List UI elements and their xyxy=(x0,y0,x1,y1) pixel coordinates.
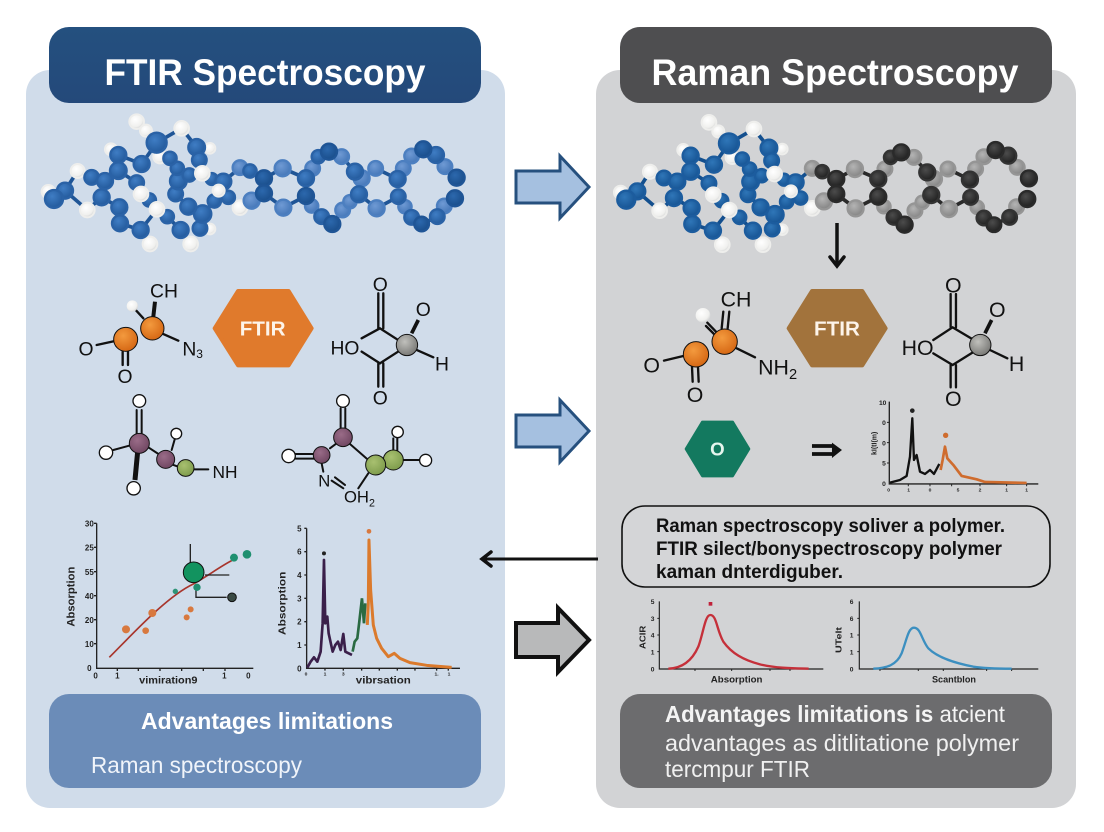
chart: Raman absorption: ACIR xyxy=(639,625,648,649)
chart: Raman absorption: 4 xyxy=(651,633,655,640)
chart: Raman absorption xyxy=(639,599,823,685)
footer panel: FTIR: Advantages limitations xyxy=(141,708,393,734)
chart: Raman scattering: 0 xyxy=(850,666,854,673)
chart: Raman spectrum xyxy=(870,400,1038,493)
chart: Raman spectrum: 0 xyxy=(882,440,886,447)
molecule: purple green: OH xyxy=(344,488,369,507)
footer panel: FTIR: Raman spectroscopy xyxy=(91,752,302,778)
chart: scatter absorption: 0 xyxy=(93,671,98,680)
panel: Raman xyxy=(596,70,1076,808)
footer panel: Raman: advantages as ditlitatione polymer xyxy=(665,730,1019,756)
chart: Raman spectrum: 10 xyxy=(879,400,887,407)
chart: Raman scattering: 1 xyxy=(850,633,854,640)
chart: Raman spectrum: 0 xyxy=(882,481,886,488)
callout: FTIR silect/bonyspectroscopy polymer xyxy=(656,539,1003,560)
chart: Raman spectrum: 0 xyxy=(929,487,932,493)
chart: absorption spectrum: 1. xyxy=(435,672,439,678)
chart: absorption spectrum: 1 xyxy=(448,672,451,678)
heading: FTIR Spectroscopy: FTIR Spectroscopy xyxy=(104,52,426,93)
chart: scatter absorption: 55 xyxy=(85,568,94,577)
chart: Raman spectrum: 5 xyxy=(882,461,886,468)
chart: absorption spectrum: 5 xyxy=(297,524,302,533)
arrow: blue upper xyxy=(516,156,589,218)
molecule: purple green: 2 xyxy=(369,498,375,510)
molecules: Raman xyxy=(643,274,1038,493)
molecule: orange: 3 xyxy=(196,347,203,361)
chart: absorption spectrum: 1 xyxy=(324,672,327,678)
chart: Raman absorption: 0 xyxy=(651,666,655,673)
molecule: orange: O xyxy=(78,339,94,360)
heading: Raman Spectroscopy xyxy=(620,27,1052,103)
arrow: black left xyxy=(482,552,598,566)
molecule: grey acid: HO xyxy=(330,338,359,359)
chart: absorption spectrum xyxy=(278,524,460,686)
chart: scatter absorption: 1 xyxy=(222,671,227,680)
badge: FTIR orange xyxy=(215,291,312,365)
badge: O green xyxy=(686,422,749,476)
molecule: grey acid: O xyxy=(373,275,388,296)
chart: absorption spectrum: 4 xyxy=(297,571,302,580)
chart: Raman scattering: 6 xyxy=(850,599,854,606)
molecule: orange NH2: NH xyxy=(758,355,789,379)
molecule: purple green: N xyxy=(318,472,330,491)
chart: Raman spectrum: 2 xyxy=(979,487,982,493)
molecule: purple green xyxy=(282,395,432,510)
callout: Raman spectroscopy soliver a polymer. xyxy=(656,516,1005,537)
molecule: grey acid: H xyxy=(435,354,449,375)
molecule: orange NH2: 2 xyxy=(789,367,797,383)
chart: Raman absorption: 5 xyxy=(651,599,655,606)
chart: absorption spectrum: 3 xyxy=(342,672,345,678)
chart: Raman spectrum: 1 xyxy=(907,487,910,493)
chart: absorption spectrum: vibrsation xyxy=(356,675,411,686)
chart: absorption spectrum: 0 xyxy=(297,665,302,674)
heading: FTIR Spectroscopy xyxy=(49,27,481,103)
molecule: grey acid: O xyxy=(945,387,962,411)
arrow: blue middle xyxy=(516,400,589,462)
chart: Raman spectrum: 0 xyxy=(882,420,886,427)
chart: Raman absorption: 3 xyxy=(651,616,655,623)
chart: scatter absorption: 1 xyxy=(115,671,120,680)
chart: absorption spectrum: 3 xyxy=(297,594,302,603)
molecule: orange: O xyxy=(117,367,133,388)
chart: absorption spectrum: Absorption xyxy=(278,572,289,635)
chart: absorption spectrum: 0 xyxy=(305,672,308,678)
panel: FTIR xyxy=(26,70,505,808)
molecule: grey acid: H xyxy=(1009,352,1024,376)
footer panel: Raman: Advantages limitations is atcient xyxy=(665,701,1006,727)
molecule: orange NH2 xyxy=(643,288,797,407)
footer panel: FTIR xyxy=(49,694,481,788)
chart: Raman spectrum: 0 xyxy=(887,487,890,493)
badge: FTIR brown: FTIR xyxy=(814,317,860,340)
molecule: orange: CH xyxy=(150,282,178,303)
molecules: FTIR xyxy=(78,275,449,510)
badge: FTIR orange: FTIR xyxy=(240,317,286,340)
chart: absorption spectrum: 6 xyxy=(297,548,302,557)
molecule: grey acid: HO xyxy=(902,336,934,360)
chart: scatter absorption: 40 xyxy=(85,592,94,601)
molecule: orange NH2: O xyxy=(643,354,660,378)
chart: scatter absorption: 10 xyxy=(85,640,94,649)
arrow: grey lower xyxy=(516,608,589,672)
molecule: orange NH2: CH xyxy=(721,288,751,312)
chart: scatter absorption: 20 xyxy=(85,616,94,625)
chart: Raman scattering: UTelt xyxy=(835,627,844,653)
chart: scatter absorption: Absorption xyxy=(66,567,78,627)
chart: Raman spectrum: kI(tI(m) xyxy=(870,431,879,455)
chart: absorption spectrum: 2 xyxy=(297,618,302,627)
chart: Raman scattering: 6 xyxy=(850,616,854,623)
molecule: grey acid: O xyxy=(373,388,388,409)
badge: O green: O xyxy=(710,439,725,460)
arrow: down to Raman molecules xyxy=(830,223,844,266)
chart: Raman scattering: Scantblon xyxy=(932,675,976,685)
callout xyxy=(622,506,1050,587)
arrow: double xyxy=(812,443,842,458)
footer panel: Raman xyxy=(620,694,1052,788)
footer panel: Raman: tercmpur FTIR xyxy=(665,756,810,782)
molecule: orange: N xyxy=(182,339,196,360)
badge: FTIR brown xyxy=(789,291,886,365)
chart: scatter absorption: 30 xyxy=(85,520,94,529)
chart: scatter absorption: 0 xyxy=(87,664,92,673)
chart: Raman spectrum: 1 xyxy=(1025,487,1028,493)
heading: Raman Spectroscopy: Raman Spectroscopy xyxy=(652,52,1019,93)
chart: Raman scattering: 1 xyxy=(850,649,854,656)
chart: Raman absorption: Absorption xyxy=(711,675,763,685)
molecule: orange NH2: O xyxy=(687,383,703,407)
chart: scatter absorption xyxy=(66,520,253,686)
molecule: grey acid: O xyxy=(416,300,431,321)
chart: absorption spectrum: 1 xyxy=(297,641,302,650)
molecule: grey acid: O xyxy=(989,298,1006,322)
molecule: grey acid xyxy=(902,274,1024,411)
polymer model: Raman xyxy=(614,115,1037,252)
chart: Raman absorption: 1 xyxy=(651,649,655,656)
chart: Raman spectrum: 1 xyxy=(1005,487,1008,493)
callout: kaman dnterdiguber. xyxy=(656,562,843,583)
chart: Raman spectrum: 5 xyxy=(957,487,960,493)
molecule: orange xyxy=(78,282,203,388)
chart: scatter absorption: vimiration9 xyxy=(139,675,198,686)
molecule: grey acid xyxy=(330,275,449,409)
molecule: purple NH: NH xyxy=(212,462,237,482)
polymer model: FTIR xyxy=(42,114,465,251)
chart: scatter absorption: 0 xyxy=(246,671,251,680)
molecule: grey acid: O xyxy=(945,274,962,298)
chart: Raman scattering xyxy=(835,599,1038,685)
chart: scatter absorption: 25 xyxy=(85,544,94,553)
molecule: purple NH xyxy=(99,395,237,495)
